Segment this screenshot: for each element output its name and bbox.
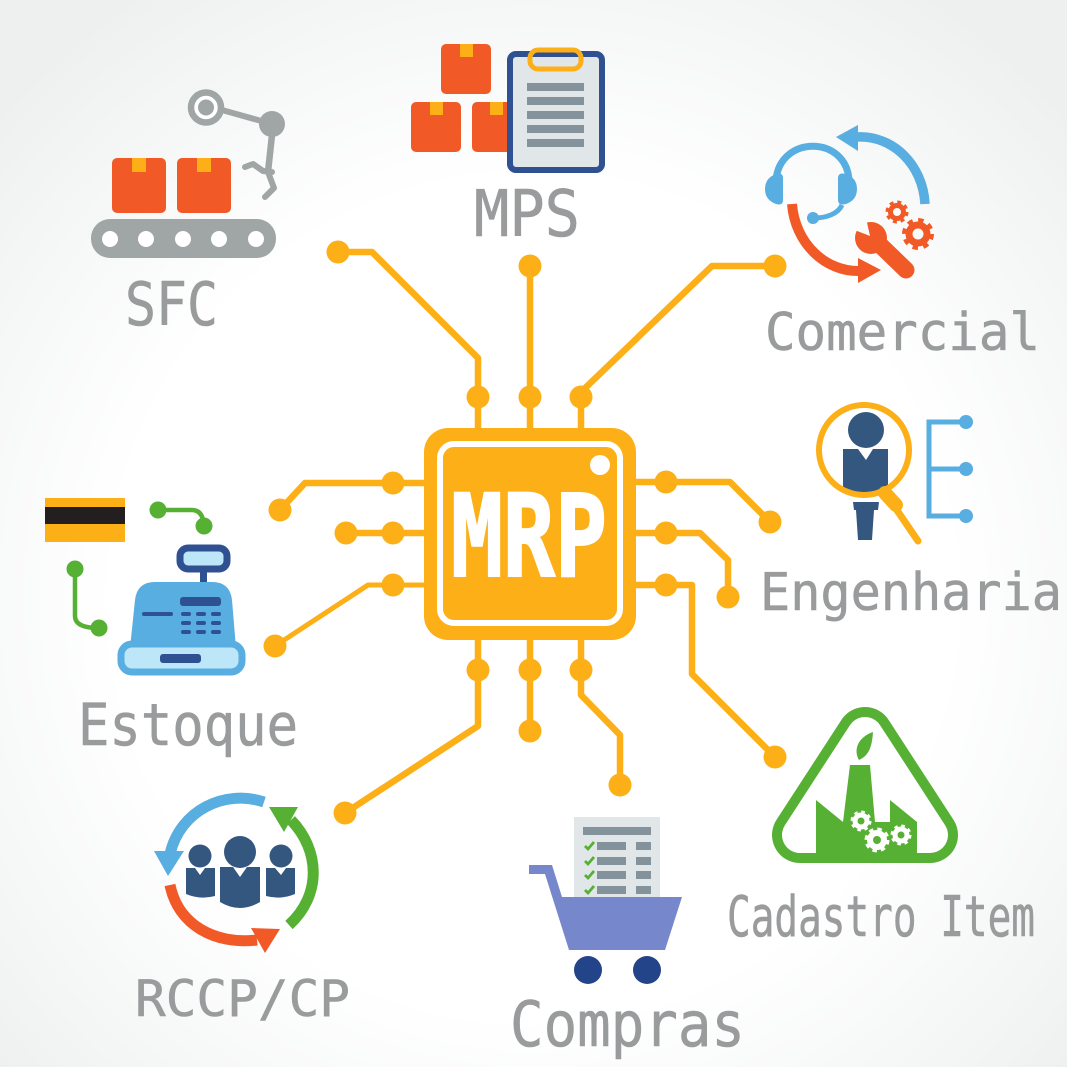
icon: MPS boxes and clipboard	[411, 44, 602, 170]
label: MPS: MPS	[474, 178, 580, 252]
icon: Comercial headset and tools	[765, 125, 932, 283]
connector nodes	[264, 240, 786, 824]
label: Engenharia: Engenharia	[760, 563, 1062, 623]
icon: Estoque card and cash register	[45, 498, 242, 672]
icon: Engenharia person under magnifier	[819, 405, 973, 541]
label: Estoque: Estoque	[78, 691, 298, 759]
label: Comercial: Comercial	[765, 303, 1040, 363]
label: RCCP/CP: RCCP/CP	[135, 970, 350, 1028]
icon: Cadastro Item factory in triangle	[800, 732, 930, 858]
central MRP chip: MRP	[451, 470, 607, 603]
central MRP chip	[424, 428, 636, 640]
icon: SFC conveyor and robot arm	[91, 92, 285, 258]
label: Compras: Compras	[510, 988, 745, 1061]
label: SFC: SFC	[125, 270, 218, 340]
icon: RCCP/CP team cycle	[154, 798, 313, 953]
icon: Compras shopping cart	[529, 817, 682, 984]
connector lines	[275, 252, 775, 813]
